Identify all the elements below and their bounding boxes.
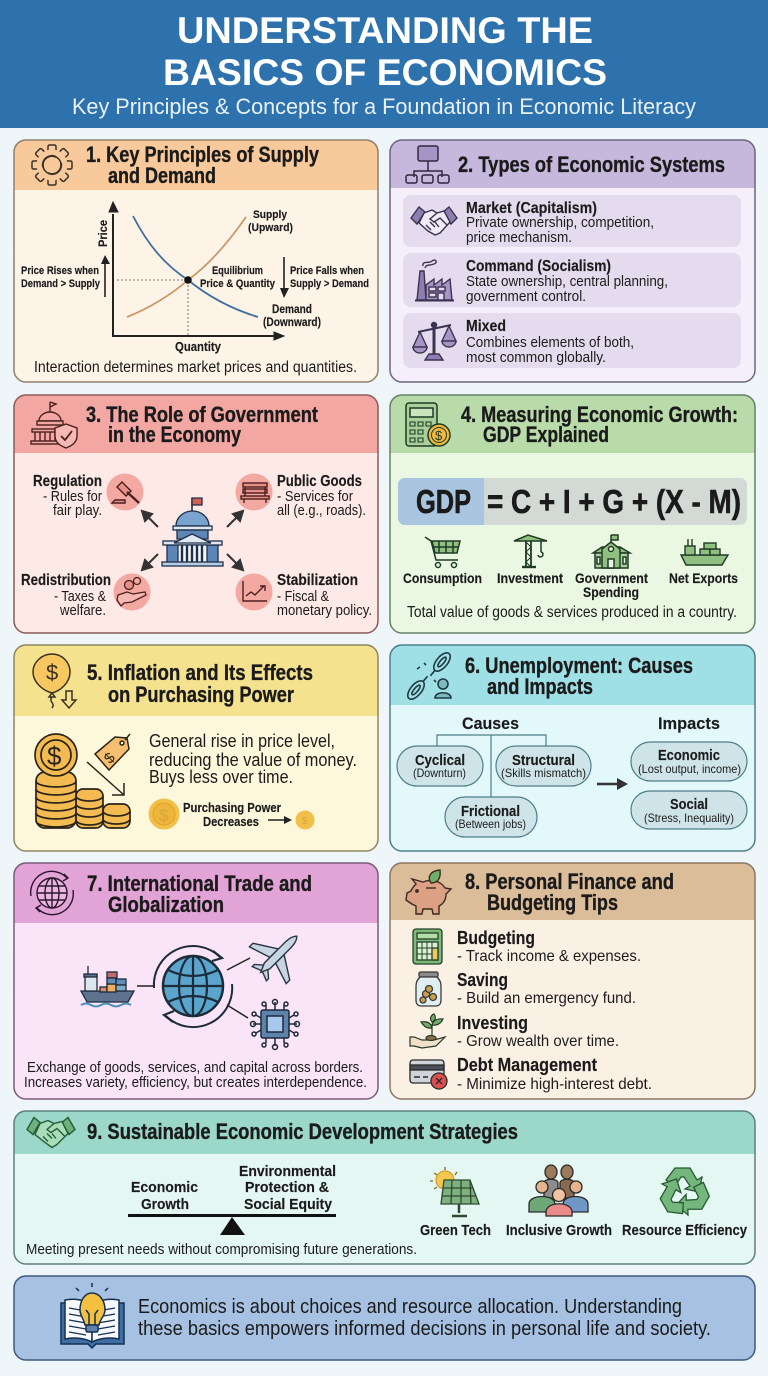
- heading: [87, 871, 312, 917]
- heading: 7. International Trade and: [87, 871, 312, 896]
- balance diagram: Environmental: [239, 1163, 336, 1180]
- chart: supply and demand curves: Price Falls when: [290, 265, 364, 277]
- heading: 5. Inflation and Its Effects: [87, 660, 313, 685]
- heading: [86, 142, 320, 188]
- chart: supply and demand curves: Quantity: [175, 340, 221, 354]
- item: net exports: [669, 539, 738, 586]
- row: market: [403, 195, 741, 247]
- panel: 7 international trade: [14, 863, 378, 1099]
- item: government spending: [575, 535, 648, 600]
- heading: in the Economy: [108, 422, 242, 447]
- panel: 3 role of government: [14, 395, 378, 633]
- item: budgeting: - Track income & expenses.: [457, 948, 641, 965]
- icon: globe with cycle arrows: [31, 871, 73, 915]
- text: conclusion: Economics is about choices and resource allocation. Understanding: [138, 1296, 682, 1318]
- item: budgeting: [413, 928, 641, 965]
- item: public goods: - Services for: [277, 489, 353, 505]
- item: redistribution: - Taxes &: [54, 589, 106, 605]
- heading: [86, 402, 319, 447]
- pill: cyclical: (Downturn): [413, 766, 466, 780]
- item: debt management: [410, 1055, 652, 1093]
- panel: conclusion: [14, 1276, 755, 1360]
- impacts column: Impacts: [658, 714, 720, 733]
- balance diagram: Growth: [141, 1196, 189, 1213]
- item: public goods: all (e.g., roads).: [277, 503, 366, 519]
- item: inclusive growth: Inclusive Growth: [506, 1222, 612, 1239]
- callout: purchasing power decreases: $: [302, 816, 308, 827]
- callout: purchasing power decreases: [148, 798, 314, 830]
- chart: supply and demand curves: Demand > Supply: [21, 278, 101, 290]
- causes column: Causes: [462, 714, 519, 733]
- icon: balance scales: [413, 322, 456, 360]
- item: saving: - Build an emergency fund.: [457, 990, 636, 1007]
- item: public goods: Public Goods: [277, 473, 362, 490]
- chart: supply and demand curves: Price Rises when: [21, 265, 99, 277]
- heading: GDP Explained: [483, 422, 609, 447]
- icon: handshake: [411, 207, 457, 235]
- impacts column: [631, 714, 747, 829]
- item: stabilization: monetary policy.: [277, 603, 372, 619]
- item: debt management: - Minimize high-interest debt.: [457, 1076, 652, 1093]
- icon: airplane: [241, 918, 315, 992]
- icon: calculator and coin: [406, 403, 450, 446]
- pill: economic: Economic: [658, 747, 720, 764]
- item: public goods: [236, 473, 366, 519]
- item: resource efficiency: Resource Efficiency: [622, 1222, 748, 1239]
- icon: org chart: [406, 146, 449, 183]
- title: UNDERSTANDING THE: [177, 10, 593, 51]
- formula bar: [398, 478, 747, 525]
- pill: cyclical: [397, 746, 483, 786]
- row: mixed: [403, 313, 741, 368]
- heading: [87, 660, 313, 707]
- row: market: Private ownership, competition,: [466, 215, 654, 231]
- heading: 6. Unemployment: Causes: [465, 653, 693, 678]
- text: interaction note: Interaction determines market prices and quantities.: [34, 359, 357, 376]
- pill: frictional: [445, 797, 537, 837]
- icon: gear: [32, 145, 72, 185]
- item: government spending: Government: [575, 570, 648, 586]
- pill: cyclical: Cyclical: [415, 752, 465, 769]
- text: trade description: [24, 1060, 367, 1091]
- item: green tech: Green Tech: [420, 1222, 491, 1239]
- item: redistribution: Redistribution: [21, 572, 111, 589]
- pill: structural: Structural: [512, 752, 575, 769]
- item: stabilization: [236, 572, 372, 619]
- callout: purchasing power decreases: Decreases: [203, 815, 259, 829]
- formula bar: GDP: [416, 483, 471, 520]
- item: investment: [497, 535, 563, 586]
- chart: supply and demand curves: Supply: [253, 209, 288, 221]
- icon: capitol and shield: [31, 402, 77, 448]
- item: redistribution: [21, 572, 150, 619]
- text: trade description: Exchange of goods, services, and capital across borders.: [27, 1060, 363, 1076]
- item: investing: Investing: [457, 1013, 528, 1033]
- pill: frictional: Frictional: [461, 803, 520, 820]
- heading: on Purchasing Power: [108, 682, 294, 707]
- icon: green handshake: [27, 1118, 75, 1148]
- item: government spending: Spending: [583, 584, 639, 600]
- chart: supply and demand curves: Equilibrium: [212, 265, 263, 277]
- icon: coin stacks: [35, 734, 130, 828]
- subtitle: Key Principles & Concepts for a Foundation in Economic Literacy: [72, 94, 696, 119]
- chart: supply and demand curves: Demand: [272, 304, 312, 316]
- text: inflation description: General rise in price level,: [149, 731, 335, 751]
- panel: 8 personal finance: [390, 863, 755, 1099]
- heading: and Impacts: [487, 674, 593, 699]
- chart: supply and demand curves: (Upward): [248, 222, 293, 234]
- panel: 6 unemployment: [390, 645, 755, 851]
- row: command: Command (Socialism): [466, 258, 611, 275]
- row: mixed: Mixed: [466, 318, 506, 335]
- icon: coin stacks: $: [47, 741, 62, 771]
- text: conclusion: these basics empowers informed decisions in personal life and society.: [138, 1318, 711, 1340]
- item: regulation: - Rules for: [43, 489, 102, 505]
- item: net exports: Net Exports: [669, 570, 738, 586]
- icon: price tag: $: [101, 749, 119, 767]
- row: market: Market (Capitalism): [466, 200, 597, 217]
- text: sustainability definition: Meeting present needs without compromising future generations.: [26, 1242, 417, 1258]
- text: inflation description: reducing the value of money.: [149, 750, 357, 770]
- arrow: causes to impacts: [597, 778, 628, 790]
- balance diagram: Protection &: [245, 1179, 329, 1196]
- chart: supply and demand curves: Price: [96, 220, 110, 247]
- pill: social: Social: [670, 796, 708, 813]
- icon: microchip: [250, 1000, 300, 1050]
- heading: [465, 869, 674, 915]
- row: command: [403, 253, 741, 307]
- pill: structural: (Skills mismatch): [501, 766, 586, 780]
- item: saving: [416, 970, 636, 1007]
- item: investing: - Grow wealth over time.: [457, 1033, 619, 1050]
- item: investing: [410, 1013, 619, 1050]
- row: command: government control.: [466, 289, 586, 305]
- item: inclusive growth: [506, 1165, 612, 1239]
- item: debt management: Debt Management: [457, 1055, 597, 1075]
- icon: cargo ship: [81, 966, 134, 1006]
- connectors: globe to ship, plane, chip: [137, 958, 250, 1018]
- text: inflation description: Buys less over time.: [149, 767, 293, 787]
- callout: purchasing power decreases: Purchasing Power: [183, 801, 281, 815]
- icon: factory: [415, 260, 454, 300]
- pill: economic: (Lost output, income): [638, 762, 741, 776]
- item: consumption: Consumption: [403, 570, 482, 586]
- panel: 9 sustainable development: [14, 1111, 755, 1264]
- text: GDP definition: Total value of goods & services produced in a country.: [407, 604, 737, 621]
- pill: social: (Stress, Inequality): [644, 811, 734, 825]
- heading: 1. Key Principles of Supply: [86, 142, 320, 167]
- item: regulation: Regulation: [33, 473, 102, 490]
- icon: price tag: [95, 734, 130, 770]
- header banner: [0, 0, 768, 128]
- item: green tech: [420, 1167, 491, 1239]
- chart: supply and demand curves: [21, 202, 369, 354]
- chart: supply and demand curves: Price & Quantity: [200, 278, 276, 290]
- item: stabilization: Stabilization: [277, 572, 358, 589]
- item: redistribution: welfare.: [59, 603, 106, 619]
- row: command: State ownership, central planning,: [466, 274, 668, 290]
- heading: [465, 653, 693, 699]
- arrows: government to functions: [142, 511, 243, 570]
- heading: Budgeting Tips: [487, 890, 618, 915]
- balance diagram: Social Equity: [244, 1196, 333, 1213]
- icon: book and lightbulb: [61, 1283, 124, 1348]
- heading: and Demand: [108, 163, 216, 188]
- pill: economic: [631, 742, 747, 781]
- icon: balloon with arrow: [33, 654, 76, 708]
- icon: capitol building: [162, 498, 223, 566]
- chart: supply and demand curves: (Downward): [263, 317, 321, 329]
- heading: [461, 402, 738, 447]
- arrow: falling value: [87, 762, 124, 795]
- panel: 1 supply and demand: [14, 140, 378, 382]
- icon: piggy bank: [406, 870, 451, 914]
- item: regulation: fair play.: [53, 503, 102, 519]
- item: budgeting: Budgeting: [457, 928, 535, 948]
- heading: 3. The Role of Government: [86, 402, 319, 427]
- chart: supply and demand curves: Supply > Demand: [290, 278, 369, 290]
- row: market: price mechanism.: [466, 230, 572, 246]
- icon: calculator and coin: $: [435, 428, 443, 443]
- panel: 5 inflation: [14, 645, 378, 851]
- panel: 4 GDP: [390, 395, 755, 633]
- heading: 9. Sustainable Economic Development Strategies: [87, 1119, 518, 1144]
- heading: Globalization: [108, 892, 224, 917]
- item: stabilization: - Fiscal &: [277, 589, 329, 605]
- panel: 2 economic systems: [390, 140, 755, 382]
- text: inflation description: [149, 731, 357, 787]
- item: investment: Investment: [497, 570, 563, 586]
- item: resource efficiency: [622, 1168, 748, 1239]
- title: [163, 10, 607, 93]
- icon: broken chain and person: [405, 650, 453, 702]
- heading: 8. Personal Finance and: [465, 869, 674, 894]
- icon: balloon with arrow: $: [46, 660, 58, 685]
- icon: globe with cycle ring: [154, 946, 232, 1027]
- title: BASICS OF ECONOMICS: [163, 52, 607, 93]
- callout: purchasing power decreases: $: [159, 806, 169, 825]
- row: mixed: most common globally.: [466, 350, 606, 366]
- row: mixed: Combines elements of both,: [466, 335, 634, 351]
- text: conclusion: [138, 1296, 711, 1340]
- item: regulation: [33, 473, 144, 519]
- causes column: [397, 714, 591, 837]
- text: trade description: Increases variety, efficiency, but creates interdependence.: [24, 1075, 367, 1091]
- item: saving: Saving: [457, 970, 508, 990]
- balance diagram: [128, 1163, 336, 1235]
- pill: structural: [496, 746, 591, 786]
- pill: frictional: (Between jobs): [455, 817, 526, 831]
- balance diagram: Economic: [131, 1179, 198, 1196]
- item: consumption: [403, 537, 482, 586]
- pill: social: [631, 791, 747, 829]
